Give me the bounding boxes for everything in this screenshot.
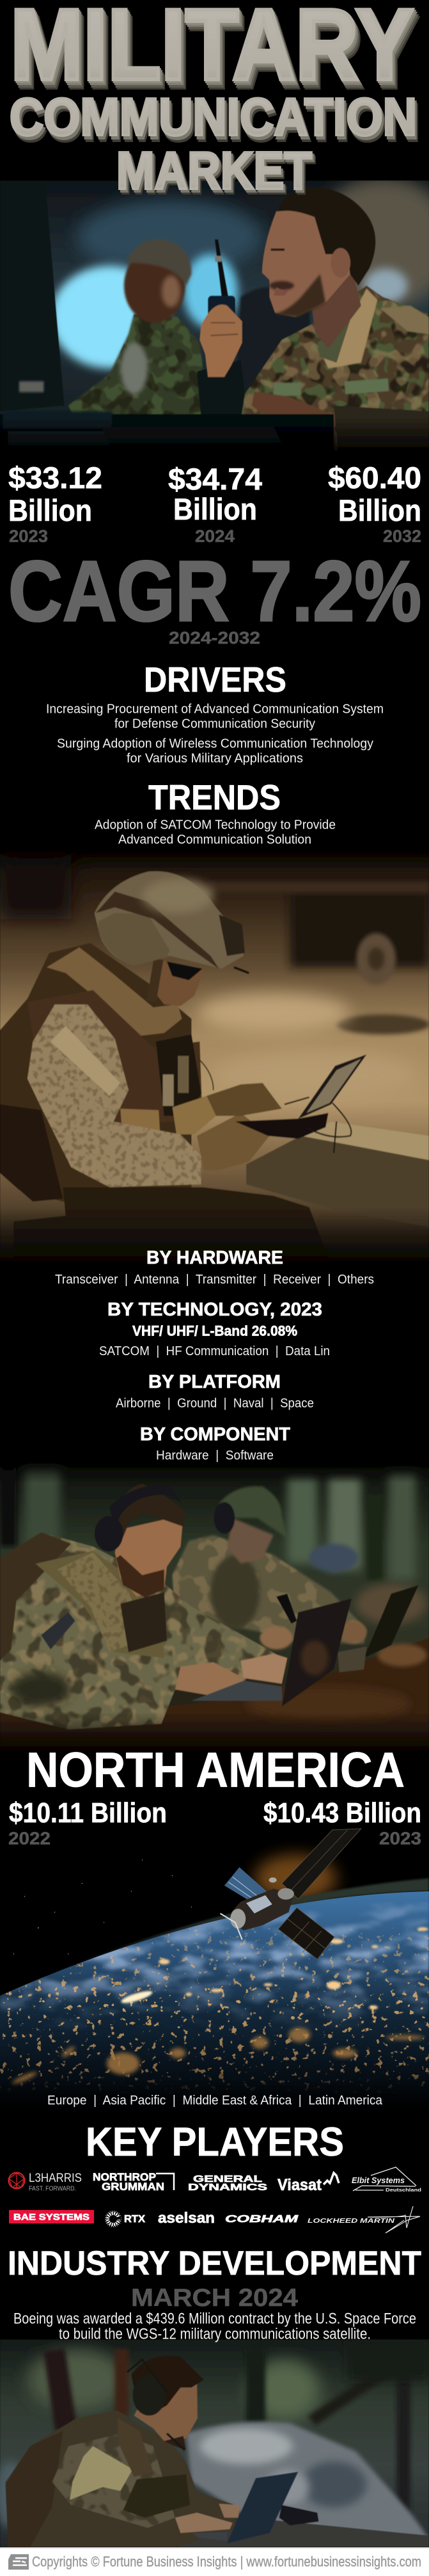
segment: by technology: BY TECHNOLOGY, 2023 — [107, 1300, 322, 1320]
segment: by hardware: Transceiver | Antenna | Transmitter | Receiver | Others — [55, 1273, 374, 1287]
industry development text: to build the WGS-12 military communications satellite. — [59, 2325, 371, 2343]
market value 2032: $60.40 — [328, 461, 421, 495]
photo: desert soldier with laptop — [0, 845, 429, 1273]
other regions: Europe | Asia Pacific | Middle East & Africa | Latin America — [47, 2094, 383, 2108]
photo: two soldiers with radio — [0, 177, 429, 464]
market value 2024: $34.74 — [168, 462, 262, 496]
logo: BAE Systems — [9, 2210, 94, 2223]
segment: by component: Hardware | Software — [156, 1449, 274, 1463]
key player logos — [9, 2167, 421, 2233]
logo: Northrop Grumman: GRUMMAN — [102, 2181, 164, 2193]
logo: Northrop Grumman — [93, 2171, 174, 2193]
title line: MARKET: MARKET — [120, 145, 315, 205]
footer logo — [8, 2554, 29, 2570]
north america value 2022: 2022 — [8, 1829, 51, 1848]
market value 2032: 2032 — [383, 527, 421, 546]
north america value 2022 — [8, 1797, 167, 1848]
photo: satellite over earth at night — [0, 1829, 429, 2094]
market value 2024: 2024 — [195, 527, 235, 546]
north america value 2022: $10.11 Billion — [9, 1797, 167, 1829]
segment: by hardware: BY HARDWARE — [146, 1248, 283, 1268]
segment: by platform — [116, 1372, 314, 1410]
logo: BAE Systems: BAE SYSTEMS — [13, 2211, 90, 2222]
drivers section: for Defense Communication Security — [114, 717, 315, 731]
market value 2023 — [8, 461, 102, 546]
market value 2024: Billion — [173, 492, 257, 526]
drivers section: DRIVERS — [144, 660, 286, 699]
logo: Elbit Systems: Elbit Systems — [352, 2175, 405, 2185]
drivers section: for Various Military Applications — [127, 751, 303, 765]
trends section: Advanced Communication Solution — [118, 833, 311, 847]
logo: L3Harris — [9, 2172, 82, 2192]
photo: soldiers with laptops in forest — [0, 1458, 429, 1754]
logo: Elbit Systems: Deutschland — [386, 2188, 421, 2193]
north america value 2023: 2023 — [379, 1829, 421, 1848]
title line: MARKET: MARKET — [118, 143, 314, 203]
market value 2023: Billion — [8, 493, 92, 527]
drivers section: Increasing Procurement of Advanced Communication System — [46, 703, 384, 717]
market value 2032: Billion — [338, 493, 421, 527]
logo: Viasat: Viasat — [277, 2176, 322, 2194]
drivers section — [46, 660, 384, 765]
industry development date: MARCH 2024 — [131, 2284, 298, 2312]
segment: by technology — [99, 1300, 330, 1358]
logo: Aselsan: aselsan — [158, 2209, 215, 2226]
segment: by component: BY COMPONENT — [140, 1424, 290, 1445]
market value 2024 — [168, 462, 262, 546]
logo: Cobham: COBHAM — [225, 2214, 299, 2225]
segment: by hardware — [55, 1248, 374, 1287]
industry development text — [13, 2310, 416, 2343]
segment: by platform: Airborne | Ground | Naval | Space — [116, 1396, 314, 1410]
photo: soldier with laptop by rocks — [0, 2339, 429, 2547]
segment: by technology: SATCOM | HF Communication | Data Lin — [99, 1344, 330, 1358]
segment: by platform: BY PLATFORM — [148, 1372, 281, 1392]
north america value 2023 — [263, 1797, 421, 1848]
logo: L3Harris: FAST. FORWARD. — [29, 2186, 76, 2192]
logo: L3Harris: L3HARRIS — [29, 2172, 82, 2185]
logo: RTX: RTX — [124, 2214, 145, 2225]
logo: Elbit Systems — [352, 2167, 421, 2193]
trends section — [95, 777, 336, 847]
trends section: Adoption of SATCOM Technology to Provide — [95, 818, 336, 832]
market value 2032 — [328, 461, 421, 546]
market value 2023: $33.12 — [8, 461, 102, 495]
segment: by technology: VHF/ UHF/ L-Band 26.08% — [132, 1323, 297, 1339]
title — [10, 0, 420, 205]
key players heading: KEY PLAYERS — [86, 2120, 344, 2165]
logo: RTX — [105, 2211, 145, 2227]
logo: Lockheed Martin: LOCKHEED MARTIN — [308, 2217, 395, 2225]
CAGR figure: 2024-2032 — [169, 628, 260, 648]
segment: by component — [140, 1424, 290, 1463]
logo: General Dynamics — [188, 2174, 267, 2193]
logo: Viasat — [277, 2173, 339, 2194]
logo: Northrop Grumman: NORTHROP — [93, 2171, 156, 2183]
logo: General Dynamics: DYNAMICS — [188, 2182, 267, 2193]
logo: General Dynamics: GENERAL — [193, 2174, 262, 2184]
drivers section: Surging Adoption of Wireless Communication Technology — [57, 737, 373, 751]
logo: Lockheed Martin — [308, 2206, 420, 2233]
title line: MARKET: MARKET — [116, 141, 312, 200]
market value 2023: 2023 — [9, 527, 48, 546]
trends section: TRENDS — [148, 777, 281, 817]
footer bar — [0, 2547, 429, 2576]
